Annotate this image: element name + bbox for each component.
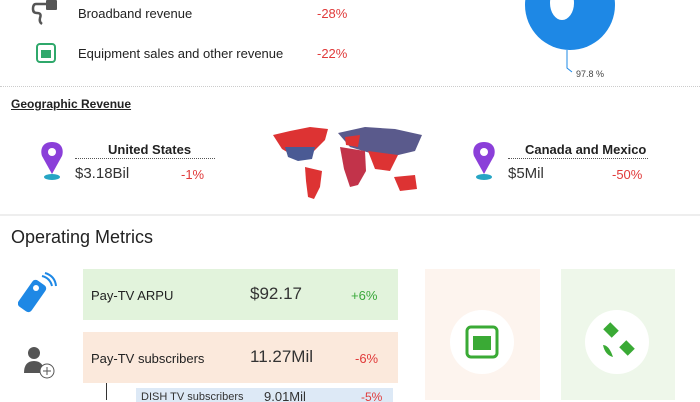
icon: pin US [41, 142, 63, 180]
panel: broadband icon card [425, 269, 540, 400]
panel: satellite icon card [561, 269, 675, 400]
US block: United States [108, 142, 191, 157]
box: DISH TV subscribers [136, 388, 393, 402]
US block [75, 142, 215, 182]
value: broadband change: -28% [317, 6, 347, 21]
Canada Mexico block: $5Mil [508, 165, 544, 182]
box: Pay-TV ARPU [83, 269, 398, 320]
Canada Mexico block [508, 142, 648, 182]
value: equipment change: -22% [317, 46, 347, 61]
icon: broadband cable [32, 0, 57, 25]
box: Pay-TV subscribers: 11.27Mil [250, 347, 313, 366]
box: Pay-TV subscribers [83, 332, 398, 383]
box: Pay-TV subscribers: Pay-TV subscribers [91, 351, 204, 366]
US block: -1% [181, 167, 204, 182]
pie chart: 97.8 % [576, 69, 604, 79]
box: Pay-TV ARPU: +6% [351, 288, 377, 303]
icon: equipment [36, 43, 56, 63]
icon: pin Canada/Mexico [473, 142, 495, 180]
Canada Mexico block: -50% [612, 167, 642, 182]
heading: geographic revenue: Geographic Revenue [11, 97, 131, 111]
icon: remote [18, 272, 57, 312]
pie chart [525, 0, 615, 79]
US block: $3.18Bil [75, 165, 129, 182]
world map [273, 127, 422, 199]
icon: add user [24, 347, 54, 378]
text: broadband revenue: Broadband revenue [78, 6, 192, 21]
Canada Mexico block: Canada and Mexico [525, 142, 646, 157]
heading: operating metrics: Operating Metrics [11, 227, 153, 247]
box: Pay-TV ARPU: Pay-TV ARPU [91, 288, 173, 303]
box: Pay-TV subscribers: -6% [355, 351, 378, 366]
box: Pay-TV ARPU: $92.17 [250, 284, 302, 303]
text: equipment revenue: Equipment sales and other revenue [78, 46, 283, 61]
